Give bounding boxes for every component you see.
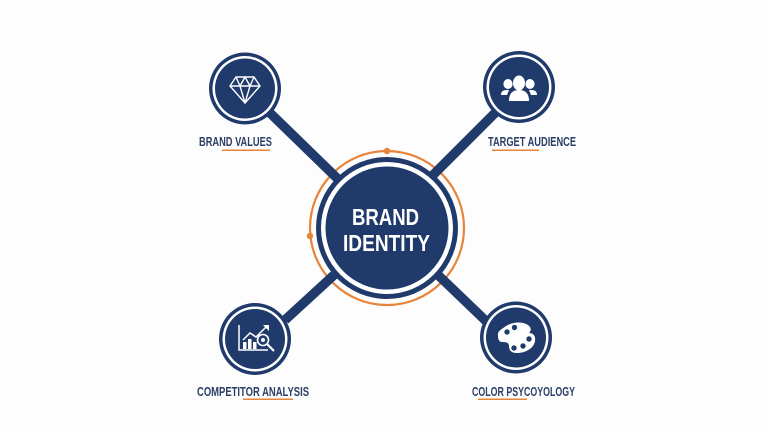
node: target audience bbox=[483, 51, 555, 123]
label: color psycoyology bbox=[472, 385, 575, 400]
node: competitor analysis bbox=[219, 303, 291, 375]
central hub: brand identity bbox=[316, 157, 458, 299]
connector spokes bbox=[268, 111, 495, 322]
icon: people bbox=[501, 76, 537, 101]
label: competitor analysis: COMPETITOR ANALYSIS bbox=[197, 385, 309, 399]
label: brand values: BRAND VALUES bbox=[199, 135, 272, 149]
label: target audience: TARGET AUDIENCE bbox=[488, 135, 576, 149]
central hub: brand identity: IDENTITY bbox=[343, 230, 430, 256]
icon: chart with magnifier bbox=[239, 325, 274, 351]
icon: diamond bbox=[230, 77, 260, 103]
node: brand values bbox=[209, 52, 281, 124]
central hub: brand identity: BRAND bbox=[352, 204, 419, 230]
node: color psychology bbox=[480, 302, 552, 374]
orange orbit ring with dots bbox=[307, 148, 464, 305]
icon: paint palette bbox=[498, 322, 535, 353]
label: color psycoyology: COLOR PSYCOYOLOGY bbox=[472, 385, 575, 399]
label: target audience bbox=[488, 135, 576, 151]
label: brand values bbox=[199, 135, 272, 151]
